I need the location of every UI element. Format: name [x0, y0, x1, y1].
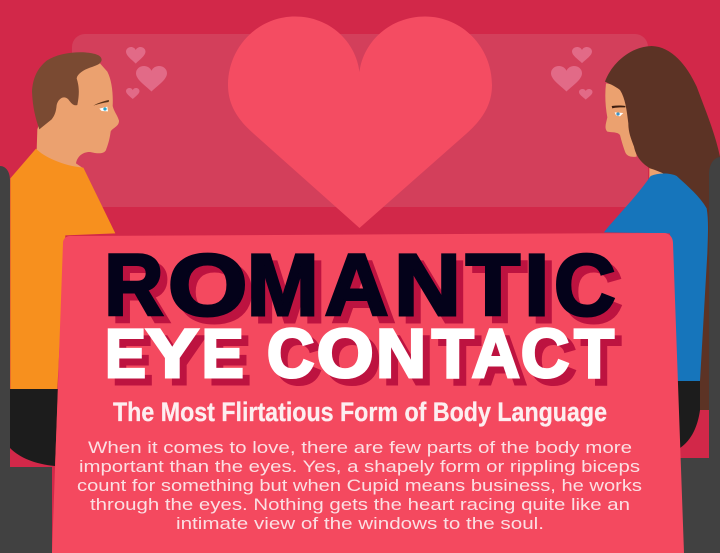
- man trousers: [10, 389, 58, 466]
- woman blouse: [604, 173, 708, 381]
- headline shadow: O: [324, 322, 381, 399]
- headline shadow: [111, 244, 623, 399]
- headline shadow: R: [111, 244, 170, 341]
- big heart: [228, 16, 492, 228]
- woman eyebrow: [612, 105, 625, 108]
- headline line one: C: [554, 237, 616, 334]
- woman face: [605, 83, 637, 157]
- headline shadow: A: [332, 244, 395, 341]
- headline line two: E: [105, 315, 146, 392]
- headline line one: M: [247, 237, 319, 334]
- intro paragraph: intimate view of the windows to the soul.: [176, 514, 544, 533]
- headline shadow: T: [581, 322, 621, 399]
- headline shadow: N: [383, 322, 433, 399]
- window panel: [72, 34, 648, 207]
- headline line two: E: [202, 315, 244, 392]
- intro paragraph: When it comes to love, there are few parts of the body more: [88, 438, 632, 457]
- woman figure: [604, 46, 720, 410]
- intro paragraph: [77, 438, 642, 533]
- man shirt: [10, 149, 115, 389]
- title panel: [52, 233, 684, 553]
- woman eye: [615, 112, 623, 116]
- man neck and head: [37, 63, 119, 168]
- headline shadow: N: [401, 244, 468, 341]
- headline line one: R: [104, 237, 163, 334]
- man figure: [10, 52, 119, 389]
- headline line one: I: [524, 237, 549, 334]
- headline shadow: E: [209, 322, 251, 399]
- headline: [104, 237, 623, 399]
- headline shadow: T: [439, 322, 481, 399]
- headline line two: T: [574, 315, 614, 392]
- headline line two: T: [432, 315, 474, 392]
- headline shadow: C: [528, 322, 576, 399]
- headline line two: Y: [146, 315, 199, 392]
- headline shadow: C: [561, 244, 623, 341]
- headline line one: A: [325, 237, 388, 334]
- headline line two: A: [472, 315, 520, 392]
- headline shadow: C: [274, 322, 321, 399]
- headline line one: O: [168, 237, 248, 334]
- headline shadow: I: [531, 244, 556, 341]
- headline shadow: Y: [153, 322, 206, 399]
- headline line two: C: [521, 315, 569, 392]
- headline shadow: A: [479, 322, 527, 399]
- headline line one: N: [394, 237, 461, 334]
- headline shadow: M: [254, 244, 326, 341]
- headline line two: N: [376, 315, 426, 392]
- woman hair: [605, 46, 720, 410]
- headline line one: T: [466, 237, 520, 334]
- left seat: [0, 166, 52, 553]
- headline shadow: O: [175, 244, 255, 341]
- woman trousers: [672, 381, 700, 452]
- intro paragraph: count for something but when Cupid means business, he works: [77, 476, 642, 495]
- headline line two: C: [267, 315, 314, 392]
- intro paragraph: through the eyes. Nothing gets the heart racing quite like an: [90, 495, 630, 514]
- small hearts left: [126, 47, 167, 99]
- man eye: [99, 107, 108, 111]
- intro paragraph: important than the eyes. Yes, a shapely form or rippling biceps: [79, 457, 640, 476]
- man hair: [32, 52, 102, 129]
- right seat: [680, 157, 720, 553]
- subtitle: The Most Flirtatious Form of Body Language: [113, 397, 607, 427]
- man eyebrow: [93, 100, 109, 106]
- headline line two: O: [317, 315, 374, 392]
- headline shadow: E: [112, 322, 153, 399]
- woman neck: [649, 163, 666, 180]
- headline shadow: T: [473, 244, 527, 341]
- small hearts right: [551, 47, 592, 100]
